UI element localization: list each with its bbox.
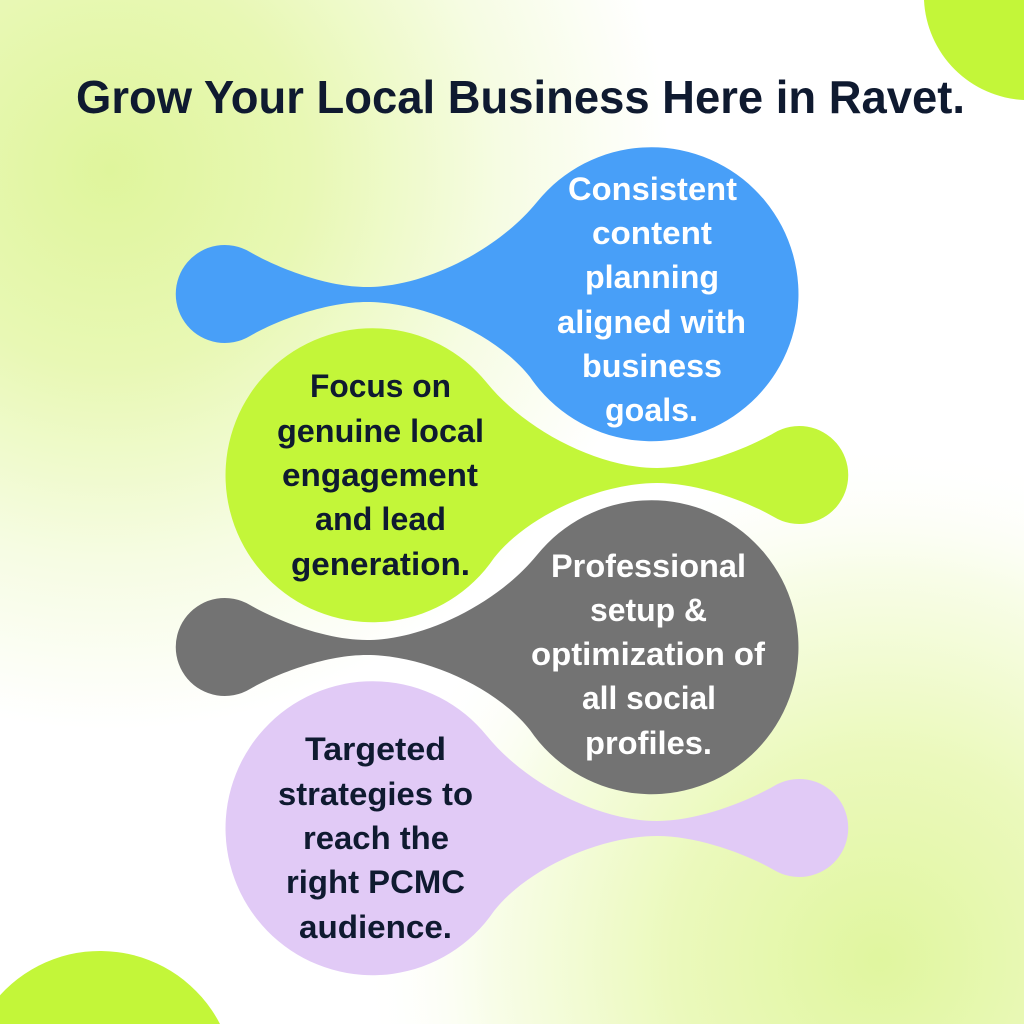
text: consistent content planning: aligned with: [557, 304, 746, 340]
text: consistent content planning: Consistent: [568, 171, 737, 207]
text: targeted strategies: [278, 731, 473, 945]
text: genuine local engagement: genuine local: [277, 413, 484, 449]
shape: gray blob: [176, 500, 798, 794]
corner circle: top right: [924, 0, 1024, 100]
shape: lilac blob: [226, 681, 848, 975]
text: targeted strategies: audience.: [299, 909, 452, 945]
text: targeted strategies: Targeted: [305, 731, 446, 767]
text: professional setup: profiles.: [585, 725, 712, 761]
text: consistent content planning: goals.: [605, 392, 698, 428]
text: genuine local engagement: generation.: [291, 546, 470, 582]
text: genuine local engagement: [277, 368, 484, 582]
text: genuine local engagement: Focus on: [310, 368, 451, 404]
text: professional setup: [531, 548, 765, 761]
text: professional setup: setup &: [590, 592, 707, 628]
text: targeted strategies: right PCMC: [286, 864, 465, 900]
text: targeted strategies: reach the: [303, 820, 449, 856]
text: consistent content planning: [557, 171, 746, 428]
title: Grow Your Local Business Here in Ravet.: [76, 71, 965, 123]
text: professional setup: optimization of: [531, 636, 765, 672]
text: genuine local engagement: engagement: [282, 457, 478, 493]
text: genuine local engagement: and lead: [315, 501, 446, 537]
corner circle: bottom left: [0, 951, 220, 1024]
text: consistent content planning: planning: [585, 259, 719, 295]
text: consistent content planning: business: [582, 348, 722, 384]
text: consistent content planning: content: [592, 215, 712, 251]
text: targeted strategies: strategies to: [278, 776, 473, 812]
text: professional setup: all social: [582, 680, 716, 716]
shape: lime blob: [226, 328, 848, 622]
shape: blue blob: [176, 147, 798, 441]
text: professional setup: Professional: [551, 548, 746, 584]
